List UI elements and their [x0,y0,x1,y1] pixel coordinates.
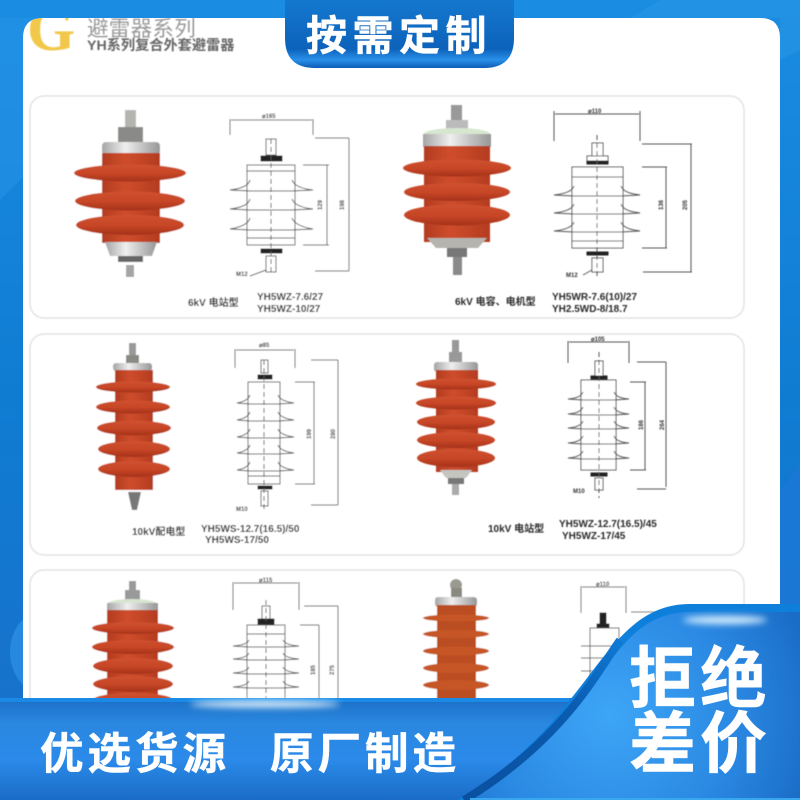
line drawing 5 [233,578,338,705]
photo: arrester 5 [92,581,174,707]
line drawing 6 [581,582,660,688]
label: bolt size: M10 [573,489,585,495]
label: total height: 275 [330,664,336,675]
label: inner height: 186 [639,419,645,430]
label: total height: 198 [340,199,346,210]
line drawing 4 [568,337,666,498]
label: bolt size: M12 [566,273,578,279]
caption: models: YH2.5WD-8/18.7 [552,304,628,315]
panel: third row products [30,570,744,770]
label: inner height: 136 [659,199,665,210]
label: diameter: ⌀165 [262,114,276,120]
label: diameter: ⌀110 [588,109,602,115]
bottom banner [0,698,800,800]
photo: arrester 3 [96,343,171,510]
label: diameter: ⌀110 [596,582,610,588]
caption: models: YH5WZ-17/45 [562,531,626,542]
caption: models: YH5WZ-7.6/27 [257,292,324,303]
panel: 10kV station type [416,337,666,542]
caption: models [552,292,637,315]
line drawing 2 [554,109,692,279]
photo: arrester 4 [416,340,496,495]
caption: models: YH5WZ-10/27 [257,304,321,315]
label: inner height: 185 [311,664,317,675]
label: total height: 264 [660,419,666,430]
label: diameter: ⌀115 [259,578,273,584]
caption: models: YH5WS-17/50 [205,535,269,546]
panel: 10kV distribution type [30,334,744,555]
label: diameter: ⌀85 [259,343,270,349]
label: inner height: 199 [307,428,313,439]
photo: arrester 2 [403,105,511,275]
caption: 6kV station type: 6kV 电站型 [188,296,239,309]
label: bolt size: M12 [236,272,248,278]
label: inner height: 129 [318,199,324,210]
photo: arrester 6 [423,579,489,705]
label: diameter: ⌀105 [591,337,605,343]
caption: models: YH5WZ-12.7(16.5)/45 [559,519,657,530]
slogan: low price: 差价 [629,707,771,782]
label: total height: 280 [331,428,337,439]
slogan: original manufacturing: 原厂制造 [270,731,460,779]
series subtitle: YH系列复合外套避雷器 [87,37,234,54]
corner badge [458,604,800,800]
line drawing 1 [230,114,349,278]
slogan: refuse: 拒绝 [629,642,771,717]
header tab [285,0,514,68]
panel: 6kV station type [30,96,744,318]
slogan: selected sources: 优选货源 [40,731,230,779]
caption: 6kV capacitor motor type: 6kV 电容、电机型 [455,295,536,308]
series title: 避雷器系列 [87,17,196,41]
caption: models [559,519,657,542]
panel: 6kV capacitor and motor type [403,105,692,315]
label: bolt size: M10 [236,507,248,513]
caption: 10kV station type: 10kV 电站型 [488,522,544,535]
caption: models: YH5WS-12.7(16.5)/50 [201,524,300,535]
line drawing 3 [235,343,338,513]
caption: models [257,292,324,315]
photo: arrester 1 [74,110,186,277]
label: total height: 205 [683,199,689,210]
caption: models [201,524,300,546]
caption: models: YH5WR-7.6(10)/27 [552,292,637,303]
heading: made to order: 按需定制 [306,13,492,59]
caption: 10kV distribution type: 10kV配电型 [132,525,185,538]
